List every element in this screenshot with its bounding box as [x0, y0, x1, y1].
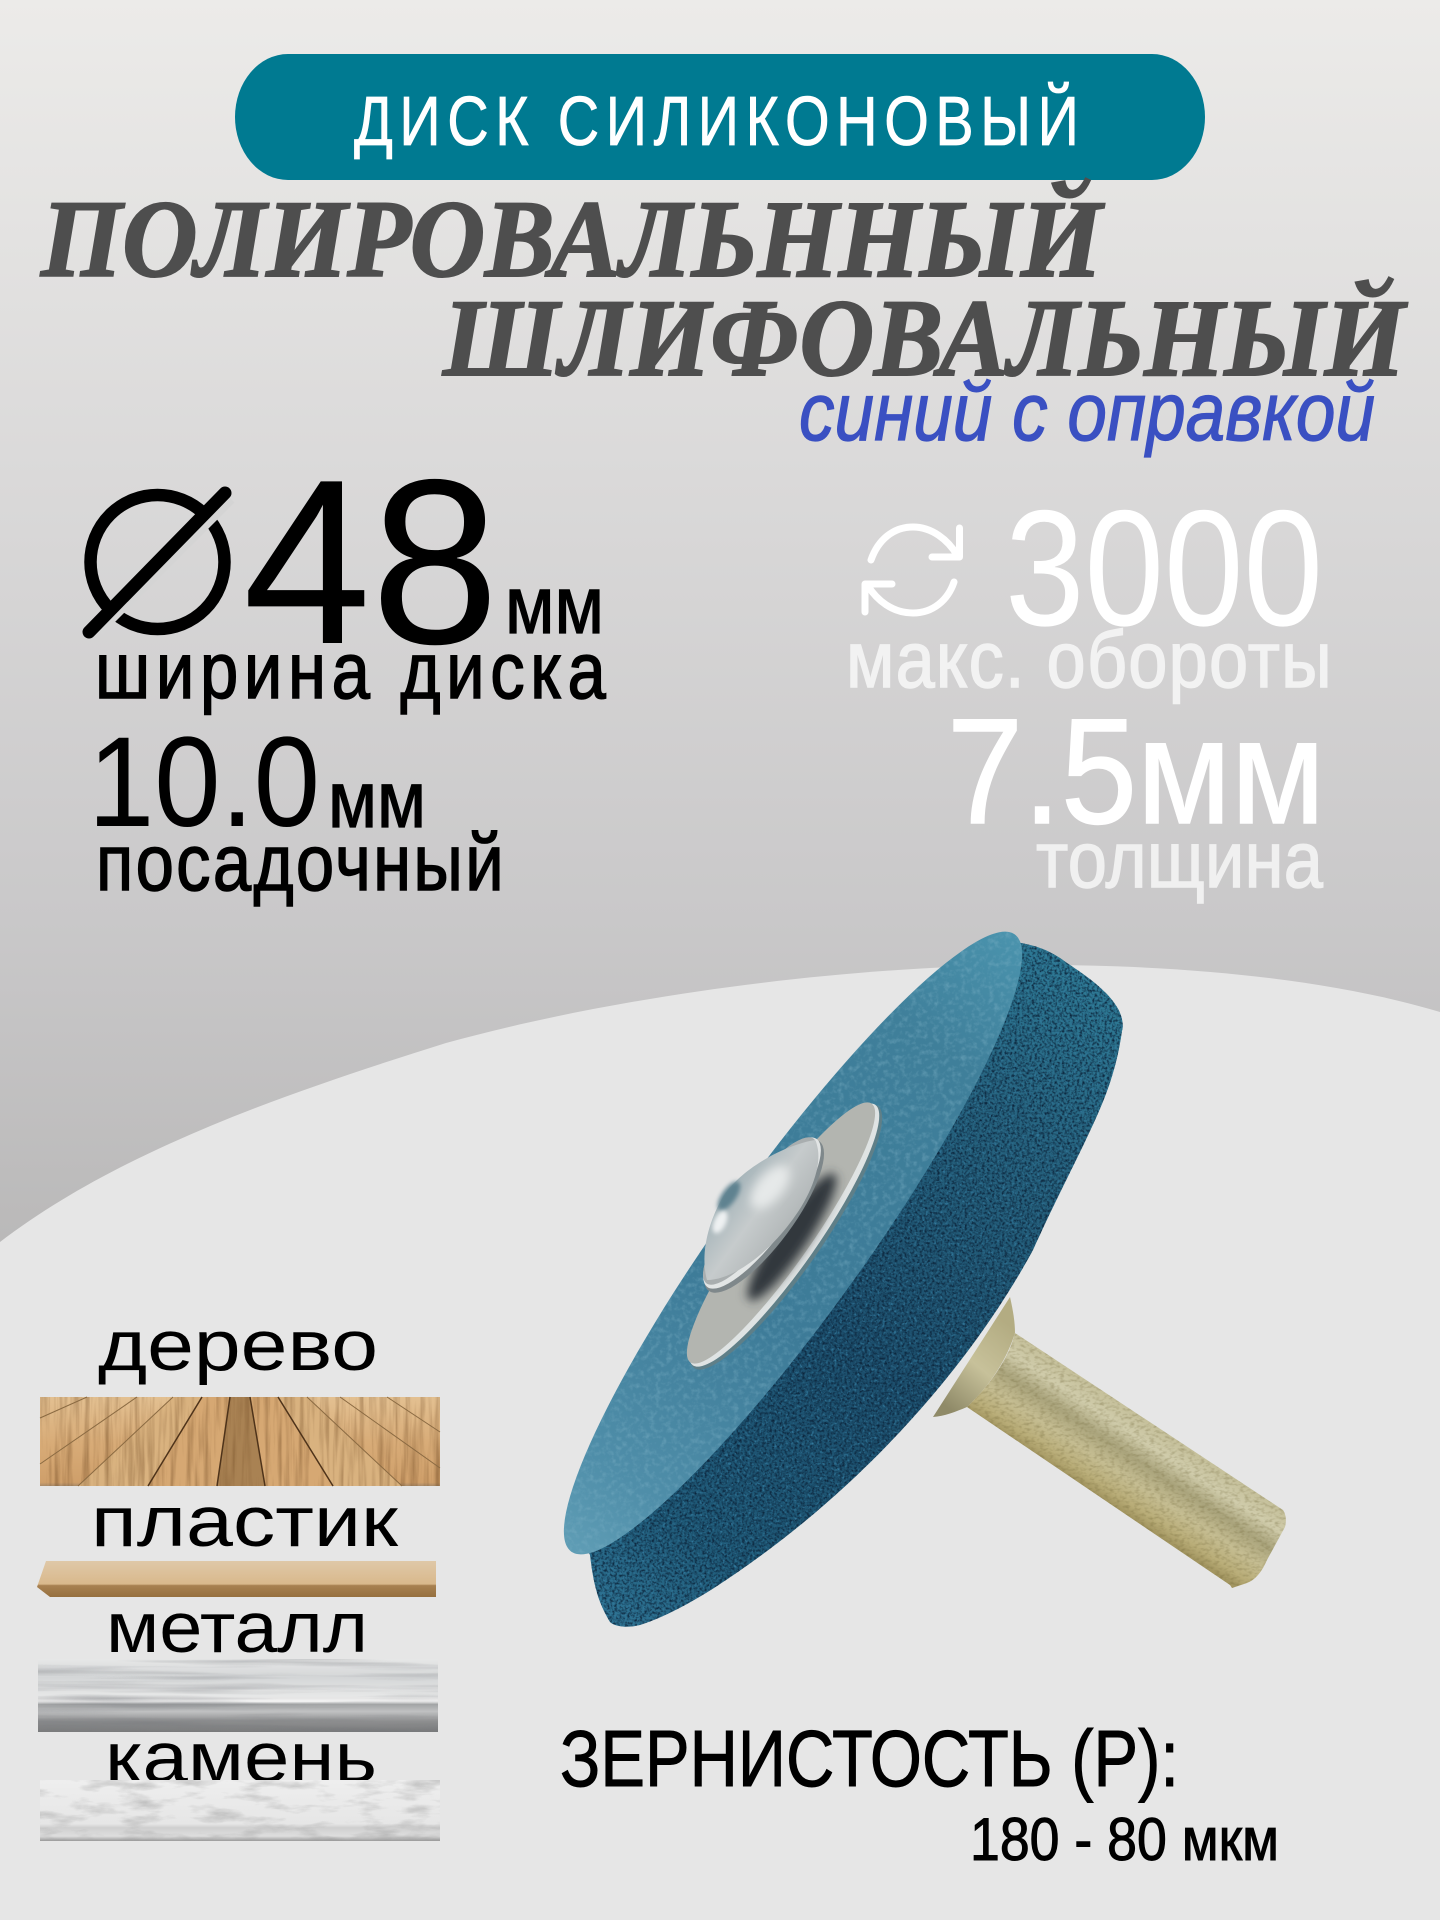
stat: disk width 48 mm: ширина диска	[95, 625, 606, 715]
label: metal: металл	[106, 1589, 368, 1668]
label: plastic: пластик	[91, 1483, 399, 1562]
title pill	[235, 54, 1205, 180]
stat: max rpm 3000	[846, 476, 1332, 704]
heading: grinding: ШЛИФОВАЛЬНЫЙ	[442, 276, 1408, 399]
stat: max rpm 3000: 3000	[1005, 476, 1323, 660]
label: wood: дерево	[98, 1307, 378, 1386]
stat: arbor 10.0 mm: посадочный	[96, 817, 504, 907]
title pill: ДИСК СИЛИКОНОВЫЙ	[354, 80, 1079, 160]
mandrel collar	[933, 1297, 1015, 1417]
disk side rim	[585, 942, 1123, 1627]
mandrel shaft	[967, 1333, 1286, 1588]
large washer	[665, 1086, 906, 1388]
grit heading: ЗЕРНИСТОСТЬ (Р):	[560, 1714, 1179, 1803]
stat: disk width 48 mm: 48	[243, 430, 499, 693]
stat: thickness 7.5 mm: толщина	[1036, 815, 1323, 904]
disk front face	[514, 893, 1072, 1593]
stat: arbor 10.0 mm: мм	[328, 755, 426, 844]
icon: rotation arrows	[865, 527, 960, 613]
screw head and small washer	[685, 1123, 843, 1308]
shadow under screw head	[736, 1165, 848, 1309]
icon: diameter symbol	[89, 493, 232, 632]
stat: disk width 48 mm: мм	[505, 560, 604, 651]
stat: max rpm 3000: макс. обороты	[846, 615, 1332, 704]
stat: thickness 7.5 mm: 7.5мм	[947, 687, 1325, 855]
stat: disk width 48 mm	[95, 430, 606, 715]
background light curved panel	[0, 965, 1440, 1920]
product photo: silicone disk on mandrel	[514, 893, 1286, 1627]
grit value: 180 - 80 мкм	[970, 1806, 1279, 1873]
label: stone: камень	[105, 1719, 377, 1798]
heading: polishing: ПОЛИРОВАЛЬННЫЙ	[40, 177, 1105, 300]
stat: arbor 10.0 mm	[88, 711, 504, 907]
stat: arbor 10.0 mm: 10.0	[88, 711, 320, 854]
material swatch: plastic	[37, 1561, 436, 1597]
material swatch: stone	[40, 1780, 440, 1841]
material swatch: wood	[40, 1397, 440, 1486]
material swatch: metal	[38, 1659, 438, 1732]
